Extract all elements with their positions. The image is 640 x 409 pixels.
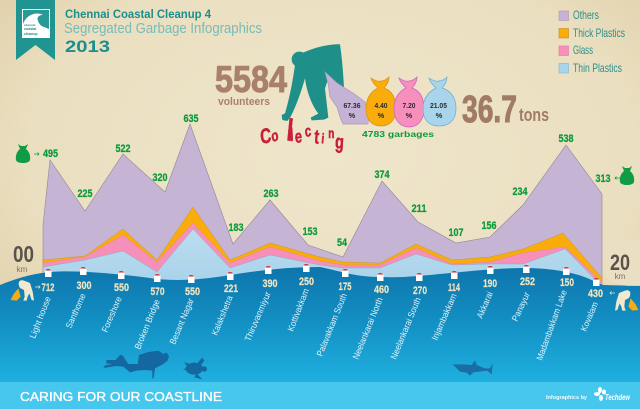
- garbage counts on peaks: 54: [337, 237, 348, 249]
- area: glass: [43, 223, 602, 285]
- credit: Techdew: [605, 393, 631, 402]
- icon: green bag left: [16, 144, 30, 163]
- distance or weight values under markers: 114: [448, 282, 461, 294]
- garbage counts on peaks: 374: [374, 169, 390, 181]
- distance or weight values under markers: 250: [299, 276, 314, 288]
- volunteers count: 5584: [215, 59, 287, 100]
- bag: glass: 7.20: [402, 101, 416, 110]
- garbage counts on peaks: 211: [412, 203, 426, 215]
- bag: others: 67.36: [344, 101, 360, 110]
- title block: [64, 7, 262, 56]
- bag: others: %: [349, 111, 356, 120]
- collecting word: t: [314, 125, 320, 148]
- garbage counts on peaks: 522: [116, 143, 130, 155]
- distance or weight values under markers: 460: [374, 284, 389, 296]
- credit: Infographics by: [546, 395, 588, 401]
- logo ribbon: [16, 0, 55, 60]
- icon: shark: [453, 360, 493, 376]
- logo mark: coastal: [24, 27, 36, 31]
- location labels: Injambakkam: [430, 292, 459, 342]
- legend: [559, 8, 625, 75]
- garbage counts on peaks: 538: [558, 133, 574, 145]
- distance or weight values under markers: 300: [76, 280, 92, 292]
- garbage counts on peaks: 313: [596, 173, 610, 185]
- distance or weight values under markers: 550: [114, 282, 129, 294]
- legend: glass: Glass: [573, 43, 593, 57]
- garbage counts on peaks: 234: [512, 186, 528, 198]
- collecting word: g: [335, 130, 345, 154]
- garbage counts on peaks: 153: [302, 226, 318, 238]
- bag: thin plastics: %: [436, 111, 443, 120]
- volunteers count: volunteers: [218, 96, 270, 108]
- garbages count: 4783 garbages: [362, 129, 434, 139]
- distance or weight values under markers: 252: [520, 276, 535, 288]
- location labels: Akkarai: [475, 290, 495, 320]
- logo mark: chennai: [24, 23, 36, 27]
- distance or weight values under markers: 190: [483, 278, 497, 290]
- distance start: 00 km: km: [17, 265, 28, 274]
- slogan: CARING FOR OUR COASTLINE: [20, 389, 222, 404]
- garbage counts on peaks: 225: [78, 188, 92, 200]
- bag: glass: %: [406, 111, 413, 120]
- location labels: Palavakkam South: [315, 292, 349, 358]
- location labels: Madambakkam Lake: [534, 289, 569, 362]
- bag: thick plastics: %: [378, 111, 385, 120]
- distance end: 20 km: [610, 250, 630, 281]
- collecting word: e: [294, 127, 303, 148]
- location labels: Panayur: [510, 291, 532, 323]
- bag: thin plastics: 21.05: [430, 101, 447, 110]
- location labels: Foreshore: [100, 295, 124, 334]
- distance or weight values under markers: 150: [560, 277, 574, 289]
- location labels: Kovalam: [579, 300, 600, 333]
- icon: walker with bag, left: [11, 280, 34, 301]
- stacked area chart: [43, 124, 602, 285]
- footer band: [0, 382, 640, 409]
- area: thick plastics: [43, 207, 602, 285]
- distance end: 20 km: 20: [610, 250, 630, 275]
- collecting word: c: [304, 121, 312, 140]
- distance or weight values under markers: 390: [262, 278, 278, 290]
- collecting word: o: [270, 125, 280, 145]
- area: others: [43, 124, 602, 285]
- location labels: Kalakshetra: [210, 294, 235, 337]
- location labels: Light house: [28, 295, 53, 340]
- garbage counts on peaks: [34, 113, 620, 249]
- credit: [546, 387, 631, 402]
- location labels: Neelankarai North: [351, 296, 385, 361]
- distance or weight values under markers: 221: [224, 283, 238, 295]
- location labels: Thiruvanmiyur: [243, 290, 273, 343]
- distance or weight values under markers: [35, 276, 615, 300]
- logo mark: cleanup: [24, 32, 38, 36]
- location labels: Kottivakkam: [286, 287, 311, 333]
- icon: person collecting garbage: [282, 44, 344, 121]
- garbage counts on peaks: 107: [448, 227, 464, 239]
- tons total: tons: [519, 105, 549, 125]
- area: thin plastics: [43, 229, 598, 285]
- garbage bags: [325, 72, 456, 127]
- 20 km end cap: [603, 240, 640, 286]
- distance end: 20 km: km: [615, 272, 626, 281]
- icon: green bag right: [620, 166, 634, 185]
- bag: glass: [394, 77, 424, 127]
- title block: 2013: [65, 37, 110, 56]
- garbage counts on peaks: 156: [482, 220, 496, 232]
- distance or weight values under markers: 550: [185, 286, 200, 298]
- location labels: Neelankarai South: [389, 296, 423, 361]
- sea: [0, 267, 640, 382]
- collecting word: C: [259, 123, 272, 149]
- collecting word: l: [290, 126, 294, 146]
- bag: others: [325, 72, 369, 124]
- location labels: [28, 287, 600, 362]
- legend: others: Others: [573, 8, 599, 22]
- garbage counts on peaks: 320: [152, 172, 168, 184]
- distance or weight values under markers: 175: [338, 281, 352, 293]
- garbage counts on peaks: 183: [228, 222, 244, 234]
- garbage counts on peaks: 495: [43, 148, 58, 160]
- bag: thick plastics: 4.40: [374, 101, 388, 110]
- distance start: 00 km: [13, 241, 34, 274]
- logo mark: [22, 9, 50, 38]
- distance start: 00 km: 00: [13, 241, 34, 267]
- tons total: 36.7: [462, 89, 517, 131]
- distance or weight values under markers: 712: [42, 282, 54, 294]
- icon: walker with bag, right: [615, 290, 638, 311]
- icon: turtle: [183, 357, 207, 379]
- garbage counts on peaks: 635: [184, 113, 198, 125]
- distance or weight values under markers: 270: [413, 285, 427, 297]
- collecting word: n: [328, 125, 334, 141]
- bucket markers: [45, 264, 600, 286]
- distance or weight values under markers: 570: [150, 286, 164, 298]
- legend: thin plastics: Thin Plastics: [573, 61, 622, 75]
- collecting word: i: [321, 130, 325, 147]
- title block: Chennai Coastal Cleanup 4: [65, 7, 211, 21]
- collecting word: l: [285, 113, 295, 148]
- garbage counts on peaks: 263: [264, 188, 278, 200]
- distance or weight values under markers: 430: [588, 288, 603, 300]
- title block: Segregated Garbage Infographics: [64, 21, 262, 37]
- icon: diver: [103, 351, 169, 378]
- bag: thin plastics: [423, 77, 456, 126]
- location labels: Santhome: [64, 292, 88, 330]
- location labels: Broken Bridge: [133, 298, 162, 351]
- location labels: Besant Nagar: [168, 297, 196, 346]
- bag: thick plastics: [366, 77, 396, 126]
